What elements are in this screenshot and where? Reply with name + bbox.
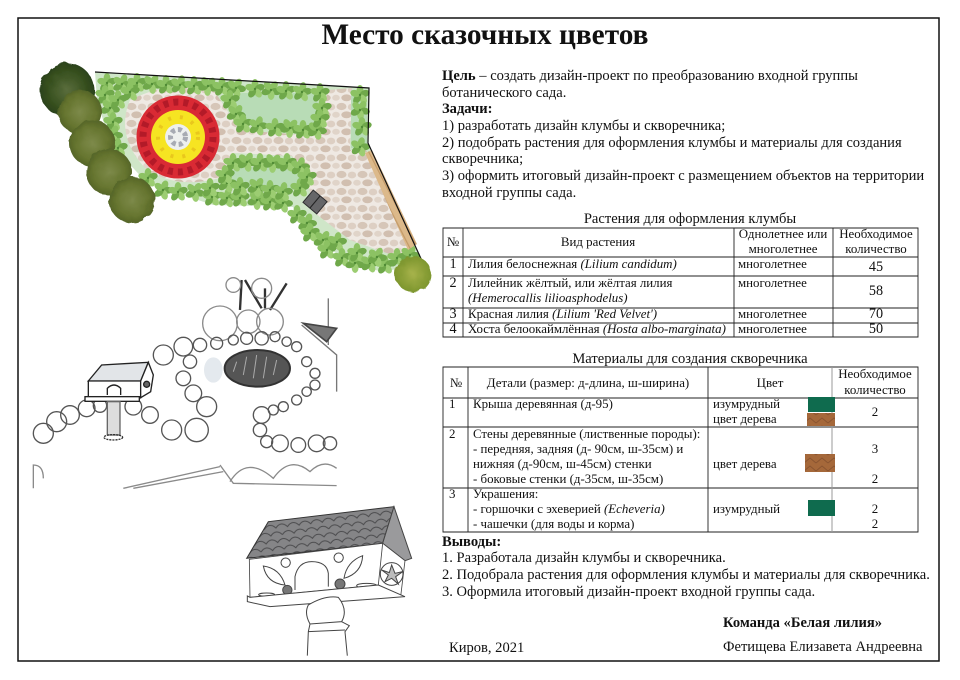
plants table header: Необходимое: [839, 227, 913, 241]
materials table header: Необходимое: [838, 367, 912, 381]
materials table rows: Крыша деревянная (д-95): [473, 397, 613, 411]
bench: [365, 150, 417, 250]
goal and tasks: Задачи:: [442, 101, 492, 117]
lawn upper: [236, 93, 318, 125]
plants table rows: 3: [449, 306, 457, 322]
birdhouse on plan: [303, 190, 327, 214]
plants table rows: 2: [449, 275, 457, 291]
conclusions: 2. Подобрала растения для оформления клумбы и материалы для скворечника.: [442, 567, 930, 583]
plants table rows: Лилия белоснежная (Lilium candidum): [468, 257, 677, 271]
materials table rows: цвет дерева: [713, 457, 777, 471]
materials table rows: - горшочки с эхеверией (Echeveria): [473, 502, 665, 516]
materials table column divider: [831, 367, 833, 532]
materials table rows: 2: [872, 405, 878, 419]
sketched trees: [240, 280, 287, 310]
plants table header: [447, 227, 913, 256]
materials table rows: цвет дерева: [713, 412, 777, 426]
materials table rows: Украшения:: [473, 487, 538, 501]
plants table rows: многолетнее: [738, 257, 807, 271]
garden plan illustration: [40, 63, 431, 292]
plants table rows: 1: [449, 256, 457, 272]
team name: Команда «Белая лилия»: [723, 615, 882, 631]
title: Место сказочных цветов: [322, 19, 648, 51]
plants table rows: Хоста белоокаймлённая (Hosta albo-marginata): [468, 322, 726, 336]
goal and tasks: ботанического сада.: [442, 85, 566, 101]
materials table rows: 1: [449, 397, 455, 411]
materials table rows: - передняя, задняя (д- 90см, ш-35см) и: [473, 442, 683, 456]
plants table: [443, 211, 918, 337]
sketched flower bed: [204, 350, 290, 387]
plants table rows: многолетнее: [738, 322, 807, 336]
conclusions: 1. Разработала дизайн клумбы и скворечника.: [442, 550, 726, 566]
materials table header: Детали (размер: д-длина, ш-ширина): [487, 376, 689, 390]
materials table rows: 3: [872, 442, 878, 456]
plants table rows: 50: [869, 321, 883, 337]
house walls: [249, 543, 405, 597]
plants table rows: 45: [869, 259, 883, 275]
materials table: [443, 351, 918, 532]
plants table rows: Красная лилия (Lilium 'Red Velvet'): [468, 307, 657, 321]
materials table header: Цвет: [757, 376, 784, 390]
materials table rows: [449, 397, 878, 531]
roof: [247, 507, 394, 558]
stone paths: [125, 87, 414, 256]
materials table rows: изумрудный: [713, 397, 780, 411]
materials table rows: - чашечки (для воды и корма): [473, 517, 634, 531]
garden ground: [95, 72, 423, 272]
goal and tasks: Цель – создать дизайн-проект по преобразованию входной группы: [442, 68, 858, 84]
conclusions: 3. Оформила итоговый дизайн-проект входной группы сада.: [442, 584, 815, 600]
materials table rows: - боковые стенки (д-35см, ш-35см): [473, 472, 663, 486]
materials table rows: 3: [449, 487, 455, 501]
sketch: birdhouse: [247, 507, 412, 656]
materials table header: №: [450, 376, 462, 390]
materials table header: количество: [844, 383, 906, 397]
trees: [40, 63, 431, 292]
flower bed: [136, 96, 220, 178]
plants table rows: Лилейник жёлтый, или жёлтая лилия: [468, 276, 673, 290]
goal and tasks: входной группы сада.: [442, 185, 576, 201]
plants table rows: 70: [869, 306, 883, 322]
author: Фетищева Елизавета Андреевна: [723, 639, 923, 655]
sketched bushes: [33, 298, 337, 488]
stone borders: [33, 332, 337, 452]
base board: [247, 585, 405, 607]
plants table header: Вид растения: [561, 235, 635, 249]
materials table rows: 2: [449, 427, 455, 441]
conclusions: [442, 534, 930, 600]
plants table rows: 4: [449, 321, 457, 337]
city and year: Киров, 2021: [449, 640, 524, 656]
plants table rows: (Hemerocallis lilioasphodelus): [468, 291, 628, 305]
lawn right: [351, 90, 367, 148]
plants table header: многолетнее: [749, 242, 818, 256]
plants table title: Растения для оформления клумбы: [584, 211, 796, 227]
plants table header: №: [447, 235, 459, 249]
sketched birdhouse: [85, 362, 153, 440]
goal and tasks: 2) подобрать растения для оформления клумбы и материалы для создания: [442, 135, 902, 151]
plants table header: Однолетнее или: [739, 227, 827, 241]
goal and tasks: [442, 68, 924, 201]
colour swatches: [805, 397, 835, 516]
post: [307, 597, 349, 656]
plants table rows: многолетнее: [738, 276, 807, 290]
materials table title: Материалы для создания скворечника: [572, 351, 808, 367]
gable end: [383, 507, 412, 561]
materials table rows: 2: [872, 472, 878, 486]
sketch: garden perspective: [33, 278, 337, 488]
materials table rows: 2: [872, 502, 878, 516]
plants table grid: [443, 228, 918, 337]
lawn lower: [232, 167, 304, 189]
plants table rows: многолетнее: [738, 307, 807, 321]
conclusions: Выводы:: [442, 534, 501, 550]
materials table rows: 2: [872, 517, 878, 531]
materials table header: [450, 367, 912, 397]
garden edge lines: [95, 72, 423, 263]
plants table rows: 58: [869, 283, 883, 299]
plants table header: количество: [845, 242, 907, 256]
materials table rows: Стены деревянные (лиственные породы):: [473, 427, 700, 441]
goal and tasks: 1) разработать дизайн клумбы и скворечника;: [442, 118, 725, 134]
plants table rows: [449, 256, 883, 337]
goal and tasks: 3) оформить итоговый дизайн-проект с размещением объектов на территории: [442, 168, 924, 184]
materials table rows: изумрудный: [713, 502, 780, 516]
goal and tasks: скворечника;: [442, 151, 523, 167]
plant borders: [94, 70, 423, 277]
door and windows: [259, 553, 403, 596]
materials table rows: нижняя (д-90см, ш-45см) стенки: [473, 457, 652, 471]
materials table grid: [443, 367, 918, 532]
